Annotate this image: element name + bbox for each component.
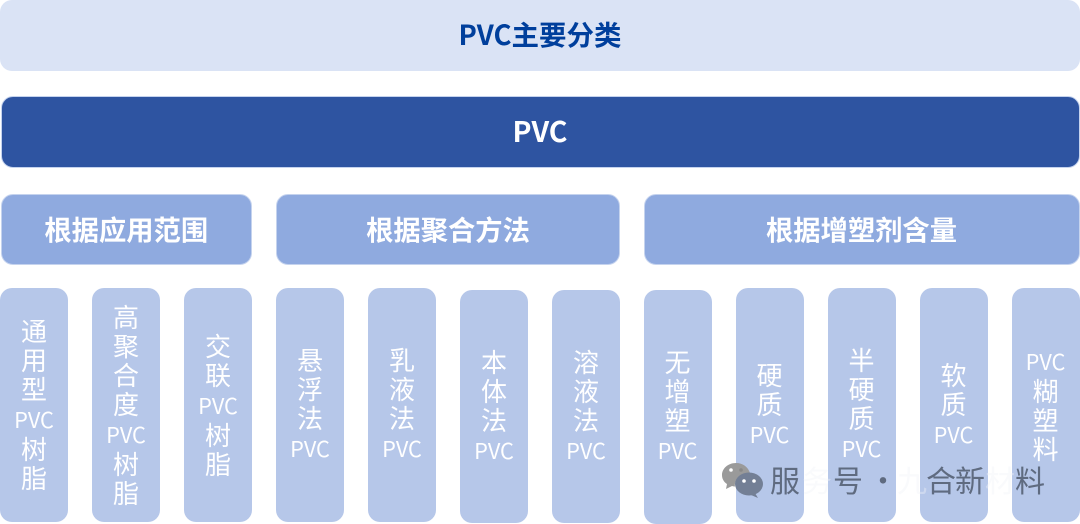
card: paste: 糊	[1032, 372, 1058, 409]
card: general purpose: PVC	[14, 404, 54, 435]
card: semi-rigid: PVC	[842, 433, 881, 464]
watermark: text: 九	[897, 457, 927, 501]
card: crosslinked	[184, 288, 252, 522]
watermark: text: 号	[833, 457, 863, 501]
category: application	[0, 194, 252, 265]
card: semi-rigid: 质	[848, 399, 874, 436]
watermark: text: 务	[802, 457, 832, 501]
card: crosslinked: 树	[205, 416, 231, 453]
card: bulk: 体	[481, 372, 507, 409]
watermark: text: 服	[770, 457, 800, 501]
card: solution: PVC	[566, 435, 606, 466]
watermark: text: 合	[926, 457, 956, 501]
card: emulsion: 液	[389, 370, 415, 407]
root bar: PVC	[0, 96, 1080, 168]
card: high polymerization: 高	[113, 298, 139, 335]
card: bulk: 本	[481, 343, 507, 380]
category: application: 根据应用范围	[44, 208, 208, 248]
watermark: text: 材	[985, 457, 1015, 501]
card: rigid	[736, 288, 804, 522]
card: unplasticized: 增	[664, 372, 690, 409]
category: plasticizer: 根据增塑剂含量	[766, 208, 957, 248]
card: emulsion: PVC	[382, 433, 422, 464]
category: polymerization	[276, 194, 620, 265]
card: unplasticized: 无	[664, 343, 690, 380]
card: general purpose: 通	[21, 312, 47, 349]
card: high polymerization: PVC	[106, 419, 146, 450]
watermark: text: 料	[1015, 457, 1045, 501]
card: suspension: 悬	[297, 341, 323, 378]
watermark: chat icon	[722, 463, 763, 498]
title banner: PVC主要分类	[458, 13, 622, 53]
card: high polymerization: 树	[113, 445, 139, 482]
card: unplasticized: 塑	[664, 401, 690, 438]
title banner	[0, 0, 1080, 71]
card: crosslinked: PVC	[198, 390, 238, 421]
watermark: text: ·	[868, 457, 898, 501]
category: polymerization: 根据聚合方法	[366, 208, 530, 248]
card: suspension: 浮	[297, 370, 323, 407]
card: suspension: 法	[297, 399, 323, 436]
card: solution: 法	[573, 401, 599, 438]
card: soft: 软	[940, 356, 966, 393]
card: soft: PVC	[934, 419, 973, 450]
card: crosslinked: 脂	[205, 445, 231, 482]
card: soft	[920, 288, 988, 522]
card: solution: 溶	[573, 343, 599, 380]
card: high polymerization: 度	[113, 385, 139, 422]
card: rigid: PVC	[750, 419, 789, 450]
card: unplasticized: PVC	[658, 435, 697, 466]
card: high polymerization: 合	[113, 356, 139, 393]
card: general purpose: 树	[21, 430, 47, 467]
card: bulk: 法	[481, 401, 507, 438]
card: paste: 塑	[1032, 401, 1058, 438]
card: semi-rigid: 硬	[848, 370, 874, 407]
card: rigid: 质	[756, 385, 782, 422]
card: rigid: 硬	[756, 356, 782, 393]
card: suspension	[276, 288, 344, 522]
card: general purpose	[0, 288, 68, 522]
card: emulsion	[368, 288, 436, 522]
card: solution	[552, 290, 620, 523]
card: emulsion: 法	[389, 399, 415, 436]
card: general purpose: 用	[21, 341, 47, 378]
card: paste: PVC	[1026, 346, 1065, 377]
card: unplasticized	[644, 290, 712, 524]
card: general purpose: 脂	[21, 459, 47, 496]
card: suspension: PVC	[290, 433, 330, 464]
card: solution: 液	[573, 372, 599, 409]
card: bulk	[460, 290, 528, 523]
card: semi-rigid	[828, 288, 896, 522]
card: semi-rigid: 半	[848, 341, 874, 378]
card: crosslinked: 联	[205, 356, 231, 393]
card: general purpose: 型	[21, 370, 47, 407]
watermark: text: 新	[955, 457, 985, 501]
card: high polymerization: 脂	[113, 474, 139, 511]
root bar: PVC: PVC	[512, 110, 568, 151]
card: paste	[1012, 288, 1080, 522]
card: crosslinked: 交	[205, 327, 231, 364]
card: paste: 料	[1032, 430, 1058, 467]
card: bulk: PVC	[474, 435, 514, 466]
card: high polymerization: 聚	[113, 327, 139, 364]
category: plasticizer	[644, 194, 1080, 265]
card: soft: 质	[940, 385, 966, 422]
card: emulsion: 乳	[389, 341, 415, 378]
card: high polymerization	[92, 288, 160, 522]
